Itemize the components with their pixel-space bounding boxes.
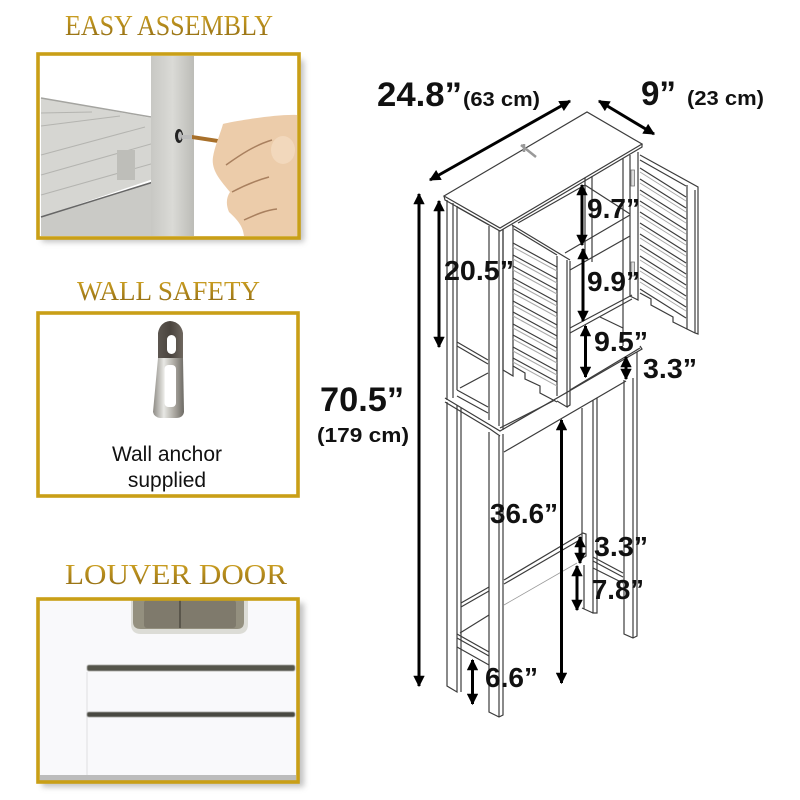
dimension labels: 9.7” <box>587 193 640 224</box>
handle cutout <box>131 600 248 634</box>
heading: louver door: LOUVER DOOR <box>65 559 288 591</box>
dimension labels: 20.5” <box>444 255 514 286</box>
wooden post <box>151 56 194 236</box>
caption: Wall anchor <box>112 443 222 466</box>
open left door <box>503 225 570 407</box>
cabinet top <box>444 112 642 231</box>
dimension arrows <box>419 101 654 704</box>
caption: supplied <box>128 469 206 492</box>
open right door <box>623 152 698 346</box>
interior shelves <box>500 176 640 428</box>
dimension labels: 6.6” <box>485 662 538 693</box>
heading: easy assembly: EASY ASSEMBLY <box>65 10 273 42</box>
panel: louver door photo <box>38 599 304 787</box>
dimension labels: 9.9” <box>587 266 640 297</box>
dimension labels: 36.6” <box>490 498 558 529</box>
icon: wall anchor bracket <box>153 321 184 418</box>
lower legs and stretchers <box>447 352 637 717</box>
dimension labels: (23 cm) <box>687 87 764 110</box>
dimension labels: 3.3” <box>643 353 697 384</box>
dimension labels: 70.5” <box>320 381 404 419</box>
heading: wall safety: WALL SAFETY <box>77 276 260 306</box>
dimension labels: 7.8” <box>592 574 644 605</box>
shelf and wood side <box>41 98 165 236</box>
left side and front legs <box>445 200 642 436</box>
dimension labels <box>317 75 764 693</box>
dimension labels: 3.3” <box>594 531 648 562</box>
screw and hole <box>175 129 218 143</box>
panel: wall safety <box>38 313 298 496</box>
dimension labels: 24.8” <box>377 76 462 114</box>
dimension labels: 9” <box>641 75 676 113</box>
panel: easy assembly photo <box>38 54 304 242</box>
hand <box>213 115 297 236</box>
dimension labels: (63 cm) <box>463 88 540 111</box>
cabinet line drawing <box>444 112 698 717</box>
louver slats <box>87 665 295 717</box>
dimension labels: 9.5” <box>594 326 648 357</box>
dimension labels: (179 cm) <box>317 424 409 447</box>
